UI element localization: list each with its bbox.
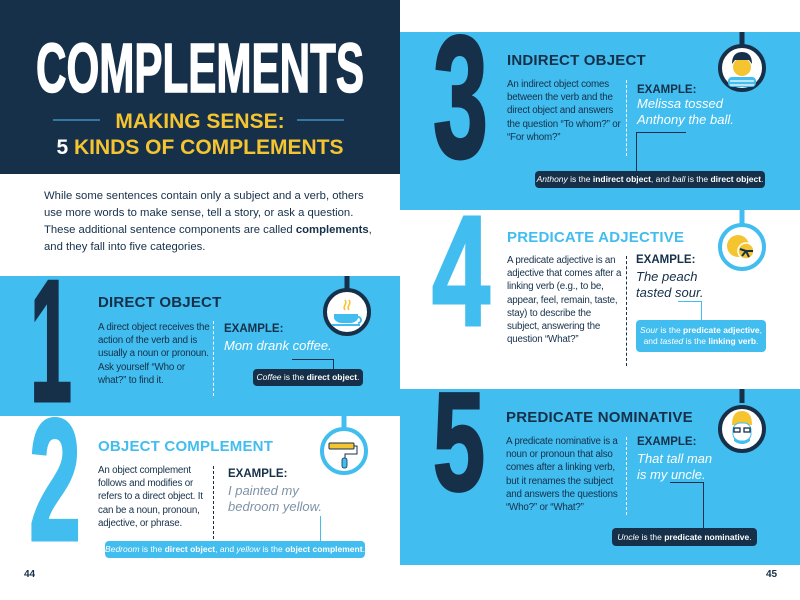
panel 2: I painted my — [228, 483, 299, 498]
panel 2: OBJECT COMPLEMENT — [98, 438, 273, 455]
panel 2: An object complement follows and modifies or refers to a direct object. It can be a noun, pronoun, adjective, or phrase. — [98, 465, 203, 529]
panel 2: bedroom yellow. — [228, 498, 322, 514]
panel 5: A predicate nominative is a noun or pronoun that also comes after a linking verb, but it renames the subject and answers the questions “Who?” or “What?” — [506, 436, 618, 513]
header panel — [0, 0, 400, 174]
title: 5 KINDS OF COMPLEMENTS — [56, 136, 344, 159]
panel 3: Melissa tossed — [637, 96, 723, 111]
panel 5: That tall man — [637, 451, 712, 466]
panel 3: Anthony the ball. — [637, 112, 734, 126]
panel 1: A direct object receives the action of the verb and is usually a noun or pronoun. Ask yourself “Who or what?” to find it. — [98, 322, 209, 386]
panel 1: Coffee is the direct object. — [256, 372, 360, 382]
panel 3: Anthony is the indirect object, and ball is the direct object. — [537, 174, 763, 184]
panel 2: EXAMPLE: — [228, 468, 287, 480]
panel 4: A predicate adjective is an adjective that comes after a linking verb (e.g., to be, appear, feel, remain, taste, stay) to describe the subject, answering the question “What?” — [507, 255, 621, 345]
page number left: 44 — [24, 569, 35, 580]
panel 1: DIRECT OBJECT — [98, 294, 221, 311]
panel 3 — [400, 32, 800, 210]
panel 4 — [400, 210, 800, 390]
page number right: 45 — [766, 569, 777, 580]
title: MAKING SENSE: — [115, 110, 285, 133]
panel 4: tasted sour. — [636, 284, 703, 300]
panel 4: and tasted is the linking verb. — [644, 336, 758, 346]
title — [36, 29, 364, 159]
panel 4: PREDICATE ADJECTIVE — [507, 229, 684, 246]
panel 4: EXAMPLE: — [636, 254, 695, 266]
panel 2 — [0, 416, 400, 566]
panel 3: EXAMPLE: — [637, 84, 696, 96]
panel 4: The peach — [636, 269, 697, 284]
panel 1: Mom drank coffee. — [224, 338, 332, 353]
panel 3: An indirect object comes between the verb and the direct object and answers the question “To whom?” or “For whom?” — [507, 79, 621, 143]
panel 5: EXAMPLE: — [637, 436, 696, 448]
intro text: While some sentences contain only a subject and a verb, others use more words to make sense, tell a story, or ask a question. These additional sentence components are called complements, and they fall into five categories. — [44, 190, 372, 253]
panel 1 — [0, 276, 400, 416]
panel 5 — [400, 389, 800, 565]
panel 2: Bedroom is the direct object, and yellow is the object complement. — [105, 544, 365, 554]
panel 4: Sour is the predicate adjective, — [640, 325, 762, 335]
panel 5: PREDICATE NOMINATIVE — [506, 409, 693, 426]
panel 1: EXAMPLE: — [224, 323, 283, 335]
panel 5: Uncle is the predicate nominative. — [617, 532, 752, 542]
panel 3: INDIRECT OBJECT — [507, 52, 646, 69]
panel 5: is my uncle. — [637, 466, 706, 482]
